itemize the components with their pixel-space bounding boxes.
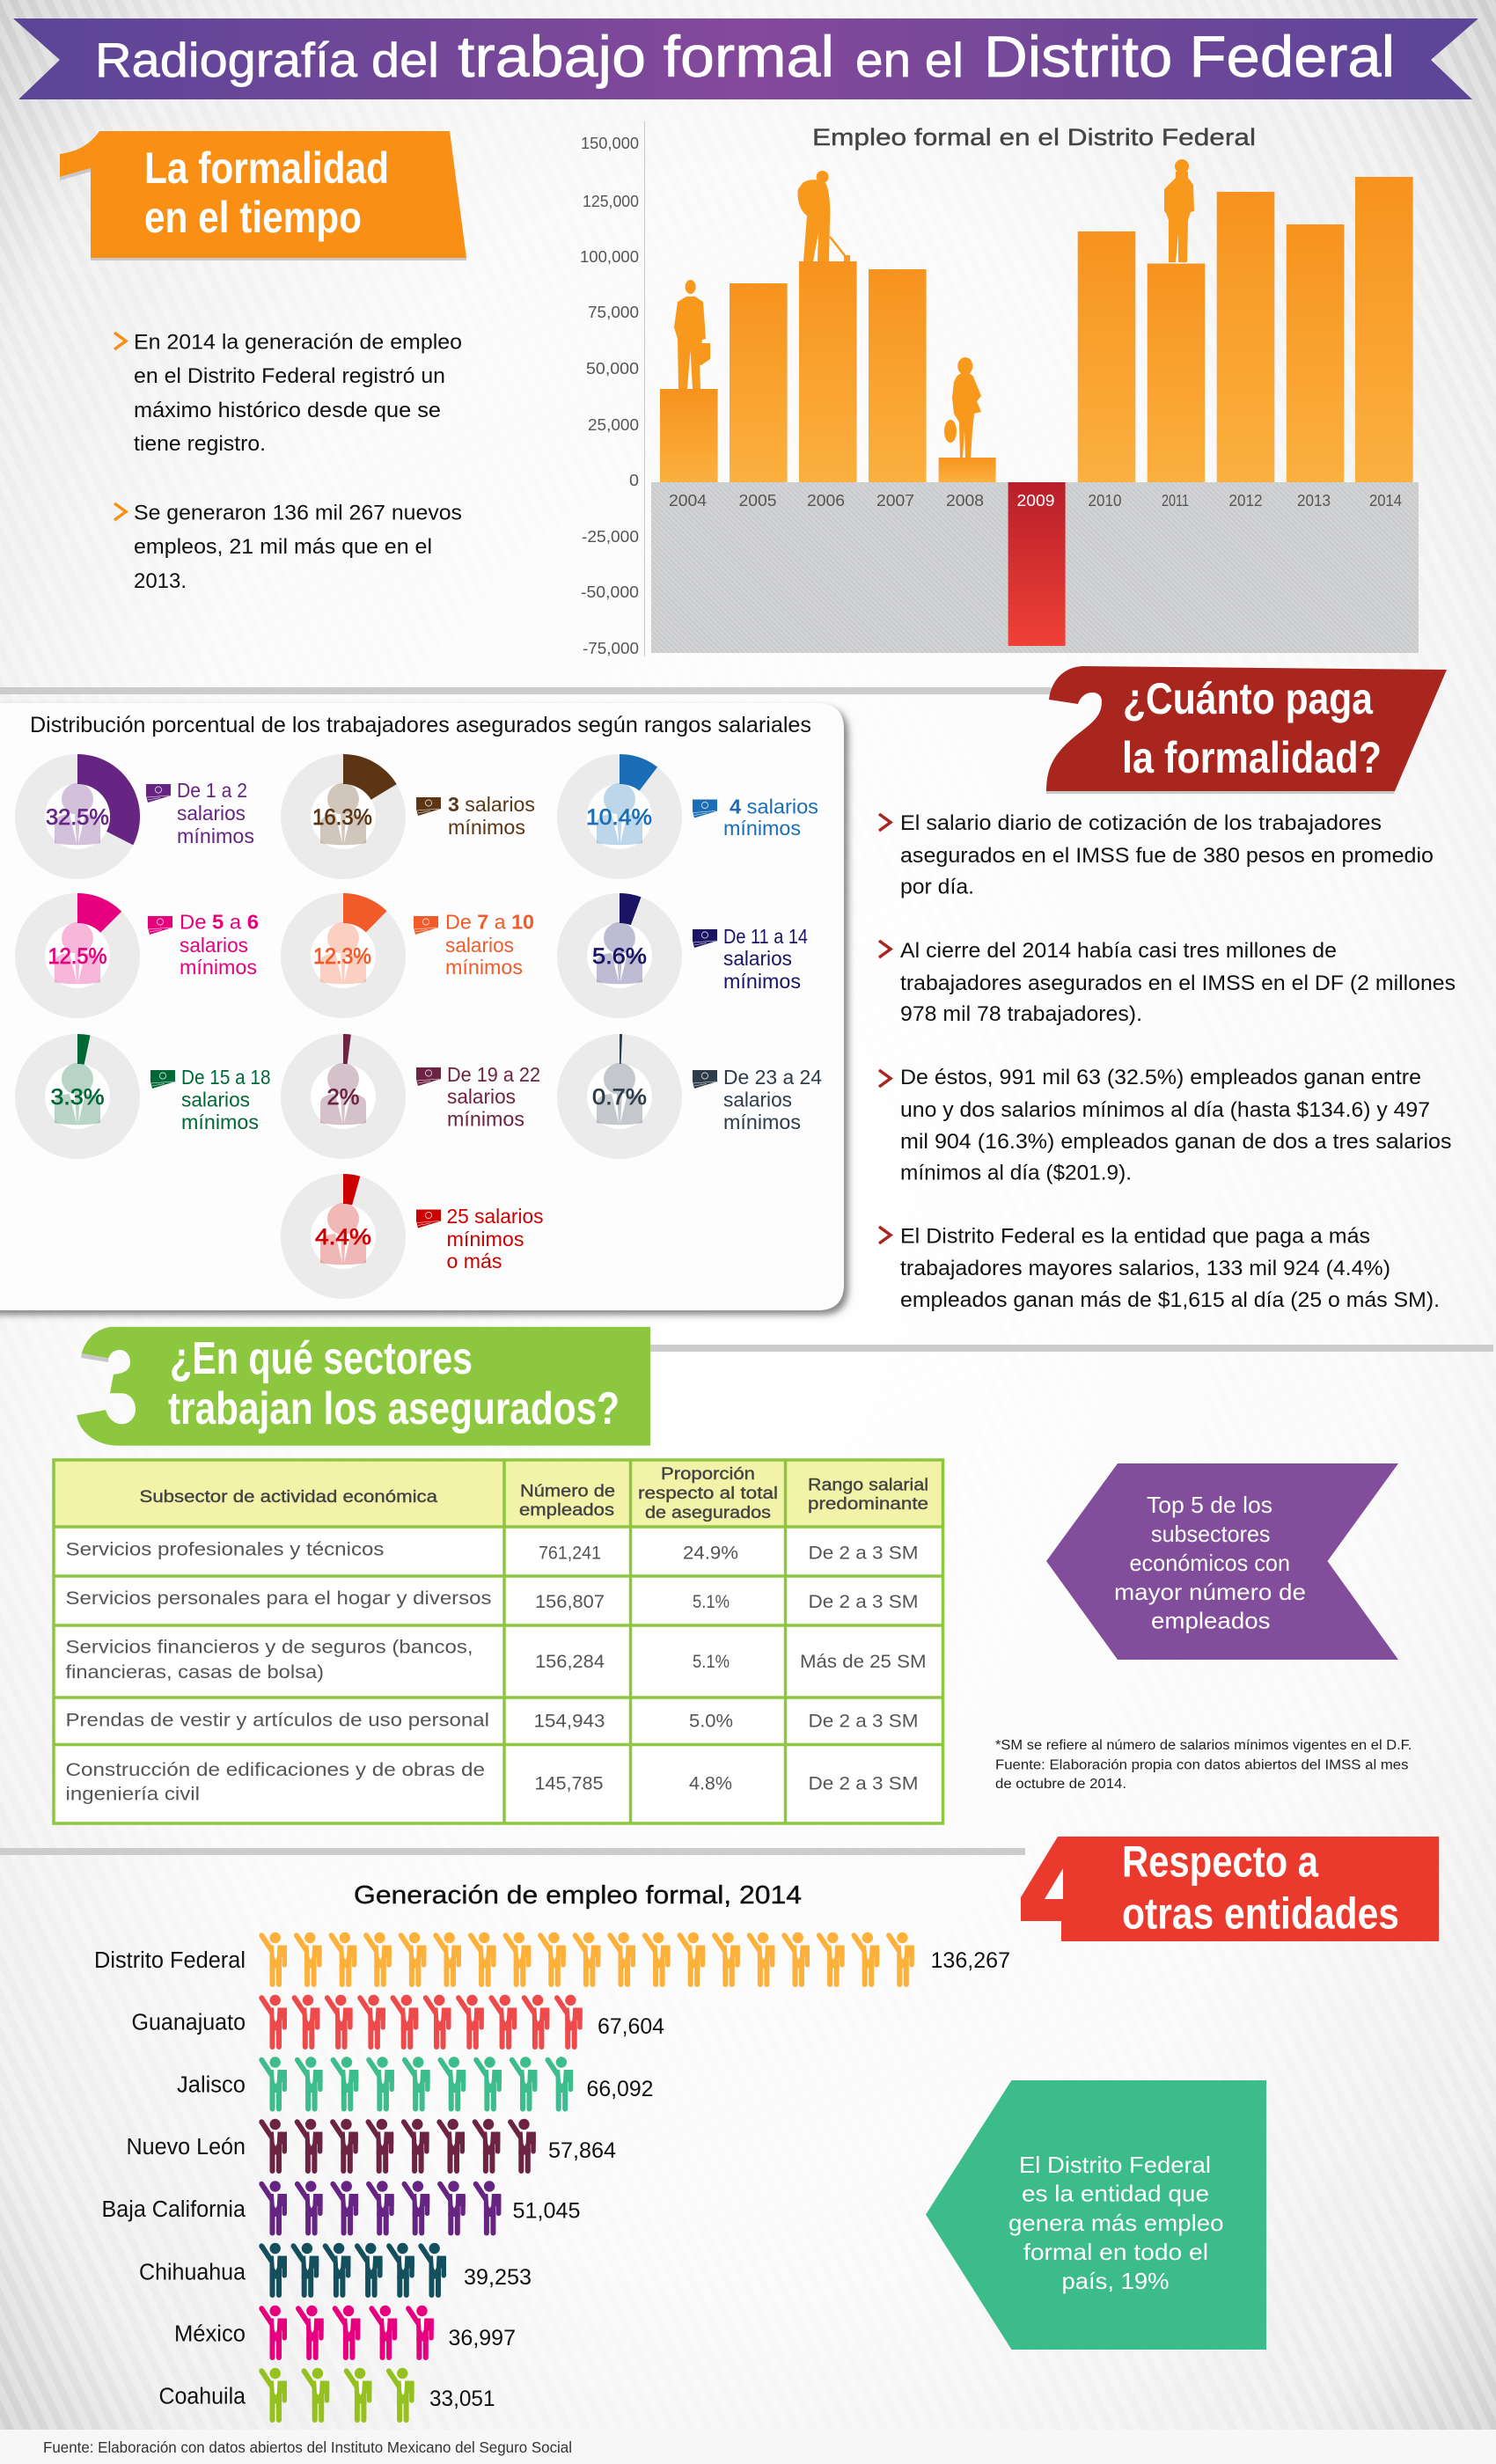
legend: De 7 a 10 salarios mínimos: mínimos xyxy=(445,956,523,979)
table header: Número de xyxy=(520,1482,615,1501)
table rows: financieras, casas de bolsa) xyxy=(65,1662,324,1683)
year labels: 2009 xyxy=(1017,492,1054,510)
title banner: en el xyxy=(855,33,964,87)
table rows: De 2 a 3 SM xyxy=(808,1774,919,1793)
y axis labels: 125,000 xyxy=(583,192,639,210)
year labels: 2010 xyxy=(1088,492,1121,510)
donut: 2% De 19 a 22 xyxy=(281,1034,406,1159)
table rows: 156,284 xyxy=(535,1652,605,1672)
section 1 text block: 2013. xyxy=(134,569,187,593)
table header: de asegurados xyxy=(645,1503,771,1522)
callout: Distrito Federal genera más empleo: país, 19% xyxy=(1061,2268,1169,2294)
legend: 3 salarios mínimos: 3 salarios xyxy=(448,793,535,816)
section 2 text block: uno y dos salarios mínimos al día (hasta $134.6) y 497 xyxy=(900,1098,1430,1122)
section 2 text block: El salario diario de cotización de los trabajadores xyxy=(900,811,1382,835)
legend: De 15 a 18 salarios mínimos xyxy=(150,1066,271,1133)
donut: 4.4% 25 salarios o más: 4.4% xyxy=(315,1225,371,1250)
legend: De 15 a 18 salarios mínimos: De 15 a 18 xyxy=(181,1066,271,1089)
section 1 text block: En 2014 la generación de empleo xyxy=(134,331,462,354)
legend: De 15 a 18 salarios mínimos: mínimos xyxy=(181,1111,259,1133)
callout: top 5 subsectores: Top 5 de los xyxy=(1147,1492,1272,1518)
bars xyxy=(660,177,1413,646)
callout: Distrito Federal genera más empleo xyxy=(926,2080,1266,2350)
icon: worker with backpack and tool xyxy=(797,171,850,261)
section 1 heading: La formalidad en el tiempo xyxy=(60,131,466,260)
donut: 5.6% De 11 a 14 xyxy=(557,893,682,1018)
table rows: Más de 25 SM xyxy=(800,1652,926,1672)
donut: 12.5% De 5 a 6: 12.5% xyxy=(48,944,107,969)
table rows: 761,241 xyxy=(539,1544,601,1563)
donut: 3.3% De 15 a 18 xyxy=(15,1034,140,1159)
legend: De 11 a 14 salarios mínimos: mínimos xyxy=(723,970,801,993)
donut: 0.7% De 23 a 24: 0.7% xyxy=(592,1085,647,1110)
table rows: Servicios personales para el hogar y diversos xyxy=(65,1588,491,1609)
section 1 text block: máximo histórico desde que se xyxy=(134,399,441,422)
row: Nuevo León xyxy=(127,2119,616,2174)
y axis labels: 100,000 xyxy=(580,247,639,266)
table rows xyxy=(65,1540,926,1804)
legend: 25 salarios mínimos o más: o más xyxy=(447,1250,502,1272)
y axis labels: 75,000 xyxy=(588,303,639,321)
row: Chihuahua xyxy=(139,2243,532,2298)
section 3 heading: ¿En qué sectores trabajan los asegurados? xyxy=(77,1327,650,1446)
year labels: 2012 xyxy=(1228,492,1262,510)
section 1 heading: La formalidad en el tiempo: La formalidad xyxy=(144,143,389,193)
legend: De 11 a 14 salarios mínimos xyxy=(693,925,808,993)
section 2 text block: asegurados en el IMSS fue de 380 pesos en promedio xyxy=(900,844,1434,868)
legend: De 1 a 2 salarios mínimos: De 1 a 2 xyxy=(177,779,247,802)
year labels xyxy=(669,492,1402,510)
legend: De 19 a 22 salarios mínimos: salarios xyxy=(447,1085,516,1108)
row: Coahuila: Coahuila xyxy=(158,2385,246,2409)
footer source: Fuente: Elaboración con datos abiertos del Instituto Mexicano del Seguro Social xyxy=(43,2438,572,2456)
legend: De 19 a 22 salarios mínimos: mínimos xyxy=(447,1107,524,1130)
icon: woman with bag xyxy=(944,357,981,458)
table rows: ingeniería civil xyxy=(65,1785,200,1804)
row: México xyxy=(174,2306,516,2360)
row: Baja California: Baja California xyxy=(102,2197,246,2222)
table: top 5 subsectors xyxy=(54,1460,943,1823)
row: México: 36,997 xyxy=(449,2326,516,2350)
year labels: 2008 xyxy=(946,492,984,510)
legend: 25 salarios mínimos o más: mínimos xyxy=(447,1228,524,1250)
year labels: 2005 xyxy=(739,492,776,510)
section 2 text block: trabajadores asegurados en el IMSS en el DF (2 millones xyxy=(900,972,1456,995)
panel heading: Distribución porcentual de los trabajadores asegurados según rangos salariales xyxy=(30,713,811,737)
table rows: De 2 a 3 SM xyxy=(808,1592,919,1612)
y axis labels: -75,000 xyxy=(583,639,639,657)
row: Distrito Federal: 136,267 xyxy=(931,1948,1010,1973)
chart title: Empleo formal en el Distrito Federal xyxy=(812,124,1256,150)
legend: De 7 a 10 salarios mínimos: De 7 a 10 xyxy=(445,910,534,933)
section 2 text block: El Distrito Federal es la entidad que paga a más xyxy=(900,1225,1370,1248)
table rows: 5.1% xyxy=(693,1592,730,1612)
row: Guanajuato: 67,604 xyxy=(598,2014,664,2039)
legend: De 1 a 2 salarios mínimos: mínimos xyxy=(177,825,254,847)
donut: 2% De 19 a 22: 2% xyxy=(327,1085,359,1110)
row: Jalisco: 66,092 xyxy=(586,2077,653,2101)
year labels: 2004 xyxy=(669,492,707,510)
donut: 10.4% 4 salarios xyxy=(557,754,682,879)
row: México: México xyxy=(174,2321,246,2346)
callout: Distrito Federal genera más empleo: El Distrito Federal xyxy=(1019,2152,1211,2178)
row: Coahuila: 33,051 xyxy=(429,2387,495,2411)
table rows: De 2 a 3 SM xyxy=(808,1544,919,1563)
row: Distrito Federal: Distrito Federal xyxy=(94,1948,246,1973)
section 1 text block: en el Distrito Federal registró un xyxy=(134,364,445,388)
callout: top 5 subsectores xyxy=(1046,1463,1398,1660)
section 2 text block: De éstos, 991 mil 63 (32.5%) empleados ganan entre xyxy=(900,1066,1421,1089)
row: Jalisco: Jalisco xyxy=(177,2073,246,2098)
donut: 32.5% De 1 a 2 xyxy=(15,754,140,879)
section 1 text block: Se generaron 136 mil 267 nuevos xyxy=(134,502,462,524)
section 2 text block: trabajadores mayores salarios, 133 mil 924 (4.4%) xyxy=(900,1257,1390,1280)
row: Jalisco xyxy=(177,2057,653,2112)
y axis labels: -50,000 xyxy=(581,583,639,601)
row: Chihuahua: Chihuahua xyxy=(139,2260,246,2284)
table rows: Construcción de edificaciones y de obras de xyxy=(65,1760,485,1780)
table header: predominante xyxy=(808,1494,928,1514)
table rows: Servicios financieros y de seguros (bancos, xyxy=(65,1637,473,1658)
legend: 4 salarios mínimos: 4 salarios xyxy=(730,796,818,818)
table rows: 24.9% xyxy=(683,1544,738,1563)
callout: top 5 subsectores: económicos con xyxy=(1130,1550,1290,1576)
title banner: Distrito Federal xyxy=(984,24,1395,89)
donut: 12.5% De 5 a 6 xyxy=(15,893,140,1018)
y axis labels: 25,000 xyxy=(588,415,639,434)
section 3 heading: ¿En qué sectores trabajan los asegurados?: ¿En qué sectores xyxy=(170,1333,473,1384)
section 2 text block xyxy=(879,811,1456,1312)
legend: 25 salarios mínimos o más: 25 salarios xyxy=(447,1205,544,1228)
donut: 3.3% De 15 a 18: 3.3% xyxy=(51,1085,104,1110)
row: Guanajuato: Guanajuato xyxy=(132,2010,246,2035)
section 2 text block: por día. xyxy=(900,875,974,899)
legend: 3 salarios mínimos: mínimos xyxy=(448,816,525,839)
legend: De 1 a 2 salarios mínimos: salarios xyxy=(177,802,246,825)
donut: 16.3% 3 salarios xyxy=(281,754,406,879)
table header: Subsector de actividad económica xyxy=(139,1487,437,1507)
row: Nuevo León: 57,864 xyxy=(548,2138,616,2163)
section 2 text block: 978 mil 78 trabajadores). xyxy=(900,1002,1142,1026)
callout: top 5 subsectores: empleados xyxy=(1151,1607,1271,1633)
title banner: Radiografía del xyxy=(95,33,439,87)
legend: De 5 a 6 salarios mínimos: salarios xyxy=(180,934,248,957)
section 2 text block: mínimos al día ($201.9). xyxy=(900,1162,1132,1184)
row: Baja California: 51,045 xyxy=(512,2198,581,2223)
year labels: 2006 xyxy=(807,492,845,510)
section 2 text block: Al cierre del 2014 había casi tres millones de xyxy=(900,939,1337,963)
table header: Rango salarial xyxy=(808,1475,928,1494)
y axis labels: 150,000 xyxy=(581,134,639,152)
callout: Distrito Federal genera más empleo: formal en todo el xyxy=(1023,2239,1208,2265)
year labels: 2014 xyxy=(1369,492,1402,510)
donut: 4.4% 25 salarios o más xyxy=(281,1174,406,1299)
legend: 25 salarios mínimos o más xyxy=(416,1205,544,1272)
section 2 text block: mil 904 (16.3%) empleados ganan de dos a tres salarios xyxy=(900,1130,1452,1154)
callout: Distrito Federal genera más empleo: genera más empleo xyxy=(1008,2210,1223,2236)
donut: 12.3% De 7 a 10 xyxy=(281,893,406,1018)
table rows: 145,785 xyxy=(535,1774,604,1793)
legend: De 23 a 24 salarios mínimos: De 23 a 24 xyxy=(723,1066,822,1089)
table header: Proporción xyxy=(661,1464,755,1484)
callout: top 5 subsectores: mayor número de xyxy=(1114,1579,1306,1605)
table rows: 5.0% xyxy=(689,1711,733,1732)
section 1 text block: empleos, 21 mil más que en el xyxy=(134,535,432,559)
row: Coahuila xyxy=(158,2368,495,2423)
donut: 12.3% De 7 a 10: 12.3% xyxy=(313,944,371,969)
legend: De 7 a 10 salarios mínimos: salarios xyxy=(445,934,514,957)
chart heading: Generación de empleo formal, 2014 xyxy=(354,1881,802,1910)
row: Nuevo León: Nuevo León xyxy=(127,2135,246,2160)
row: Baja California xyxy=(102,2181,581,2235)
table rows: 5.1% xyxy=(693,1652,730,1672)
table rows: 4.8% xyxy=(689,1774,732,1793)
section 1 heading: La formalidad en el tiempo: en el tiempo xyxy=(144,193,362,242)
donut: 0.7% De 23 a 24 xyxy=(557,1034,682,1159)
donut: 10.4% 4 salarios: 10.4% xyxy=(586,805,652,830)
section 4 heading: Respecto a otras entidades: Respecto a xyxy=(1122,1837,1319,1887)
year labels: 2013 xyxy=(1297,492,1331,510)
donut: 32.5% De 1 a 2: 32.5% xyxy=(46,805,109,830)
footnote: SM definition and source: Fuente: Elaboración propia con datos abiertos del IMSS al mes xyxy=(995,1758,1409,1772)
chart: Empleo formal en el Distrito Federal xyxy=(580,121,1419,657)
legend: De 5 a 6 salarios mínimos: mínimos xyxy=(180,956,257,979)
icon: young worker with helmet xyxy=(1164,159,1194,262)
section 1 text block xyxy=(114,331,462,593)
callout: Distrito Federal genera más empleo: es la entidad que xyxy=(1022,2181,1209,2207)
section 2 heading: ¿Cuánto paga la formalidad?: la formalidad? xyxy=(1122,733,1382,782)
donut: 5.6% De 11 a 14: 5.6% xyxy=(592,944,647,969)
donut: 16.3% 3 salarios: 16.3% xyxy=(312,805,372,830)
year labels: 2011 xyxy=(1162,492,1189,510)
callout: top 5 subsectores: subsectores xyxy=(1151,1521,1271,1547)
y axis labels: 0 xyxy=(629,471,639,489)
pictogram chart: Generación de empleo formal, 2014 xyxy=(94,1881,1010,2423)
title banner: trabajo formal xyxy=(458,24,834,89)
legend: De 19 a 22 salarios mínimos: De 19 a 22 xyxy=(447,1063,540,1086)
legend: De 23 a 24 salarios mínimos: salarios xyxy=(723,1088,792,1111)
row: Guanajuato xyxy=(132,1995,664,2050)
legend: 4 salarios mínimos xyxy=(693,796,818,840)
section 4 heading: Respecto a otras entidades xyxy=(1021,1837,1439,1941)
legend: De 7 a 10 salarios mínimos xyxy=(414,910,534,979)
table rows: 156,807 xyxy=(535,1592,605,1612)
legend: De 11 a 14 salarios mínimos: salarios xyxy=(723,947,792,970)
section 3 heading: ¿En qué sectores trabajan los asegurados?: trabajan los asegurados? xyxy=(168,1383,620,1434)
y axis labels: -25,000 xyxy=(582,527,639,546)
legend: De 11 a 14 salarios mínimos: De 11 a 14 xyxy=(723,925,808,948)
section 2 text block: empleados ganan más de $1,615 al día (25 o más SM). xyxy=(900,1288,1440,1312)
legend: De 5 a 6 salarios mínimos: De 5 a 6 xyxy=(180,910,259,933)
legend: De 23 a 24 salarios mínimos: mínimos xyxy=(723,1111,801,1133)
legend: 4 salarios mínimos: mínimos xyxy=(723,817,801,840)
table rows: Servicios profesionales y técnicos xyxy=(65,1540,384,1559)
row: Distrito Federal xyxy=(94,1932,1010,1987)
footnote: SM definition and source: *SM se refiere al número de salarios mínimos vigentes en el D.F. xyxy=(995,1738,1412,1753)
section 4 heading: Respecto a otras entidades: otras entidades xyxy=(1122,1888,1399,1938)
footnote: SM definition and source xyxy=(995,1738,1412,1792)
legend: De 5 a 6 salarios mínimos xyxy=(148,910,259,979)
panel: salary distribution xyxy=(0,703,844,1310)
title banner xyxy=(13,18,1478,99)
year labels: 2007 xyxy=(876,492,914,510)
table rows: Prendas de vestir y artículos de uso personal xyxy=(65,1711,489,1730)
section 2 heading: ¿Cuánto paga la formalidad? xyxy=(1046,666,1447,794)
row: Chihuahua: 39,253 xyxy=(464,2265,532,2290)
section 2 heading: ¿Cuánto paga la formalidad?: ¿Cuánto paga xyxy=(1123,674,1374,723)
footnote: SM definition and source: de octubre de 2014. xyxy=(995,1777,1126,1792)
legend: De 1 a 2 salarios mínimos xyxy=(146,779,254,847)
y axis labels xyxy=(580,134,639,657)
table rows: 154,943 xyxy=(533,1711,605,1732)
section 1 text block: tiene registro. xyxy=(134,432,266,456)
table header: respecto al total xyxy=(638,1484,778,1503)
legend: 3 salarios mínimos xyxy=(416,793,535,839)
icon: man with briefcase xyxy=(674,280,710,389)
legend: De 23 a 24 salarios mínimos xyxy=(693,1066,822,1133)
legend: De 19 a 22 salarios mínimos xyxy=(416,1063,540,1130)
table rows: De 2 a 3 SM xyxy=(808,1711,919,1732)
y axis labels: 50,000 xyxy=(586,359,639,378)
table header xyxy=(139,1464,928,1522)
table header: empleados xyxy=(519,1500,614,1520)
legend: De 15 a 18 salarios mínimos: salarios xyxy=(181,1088,250,1111)
